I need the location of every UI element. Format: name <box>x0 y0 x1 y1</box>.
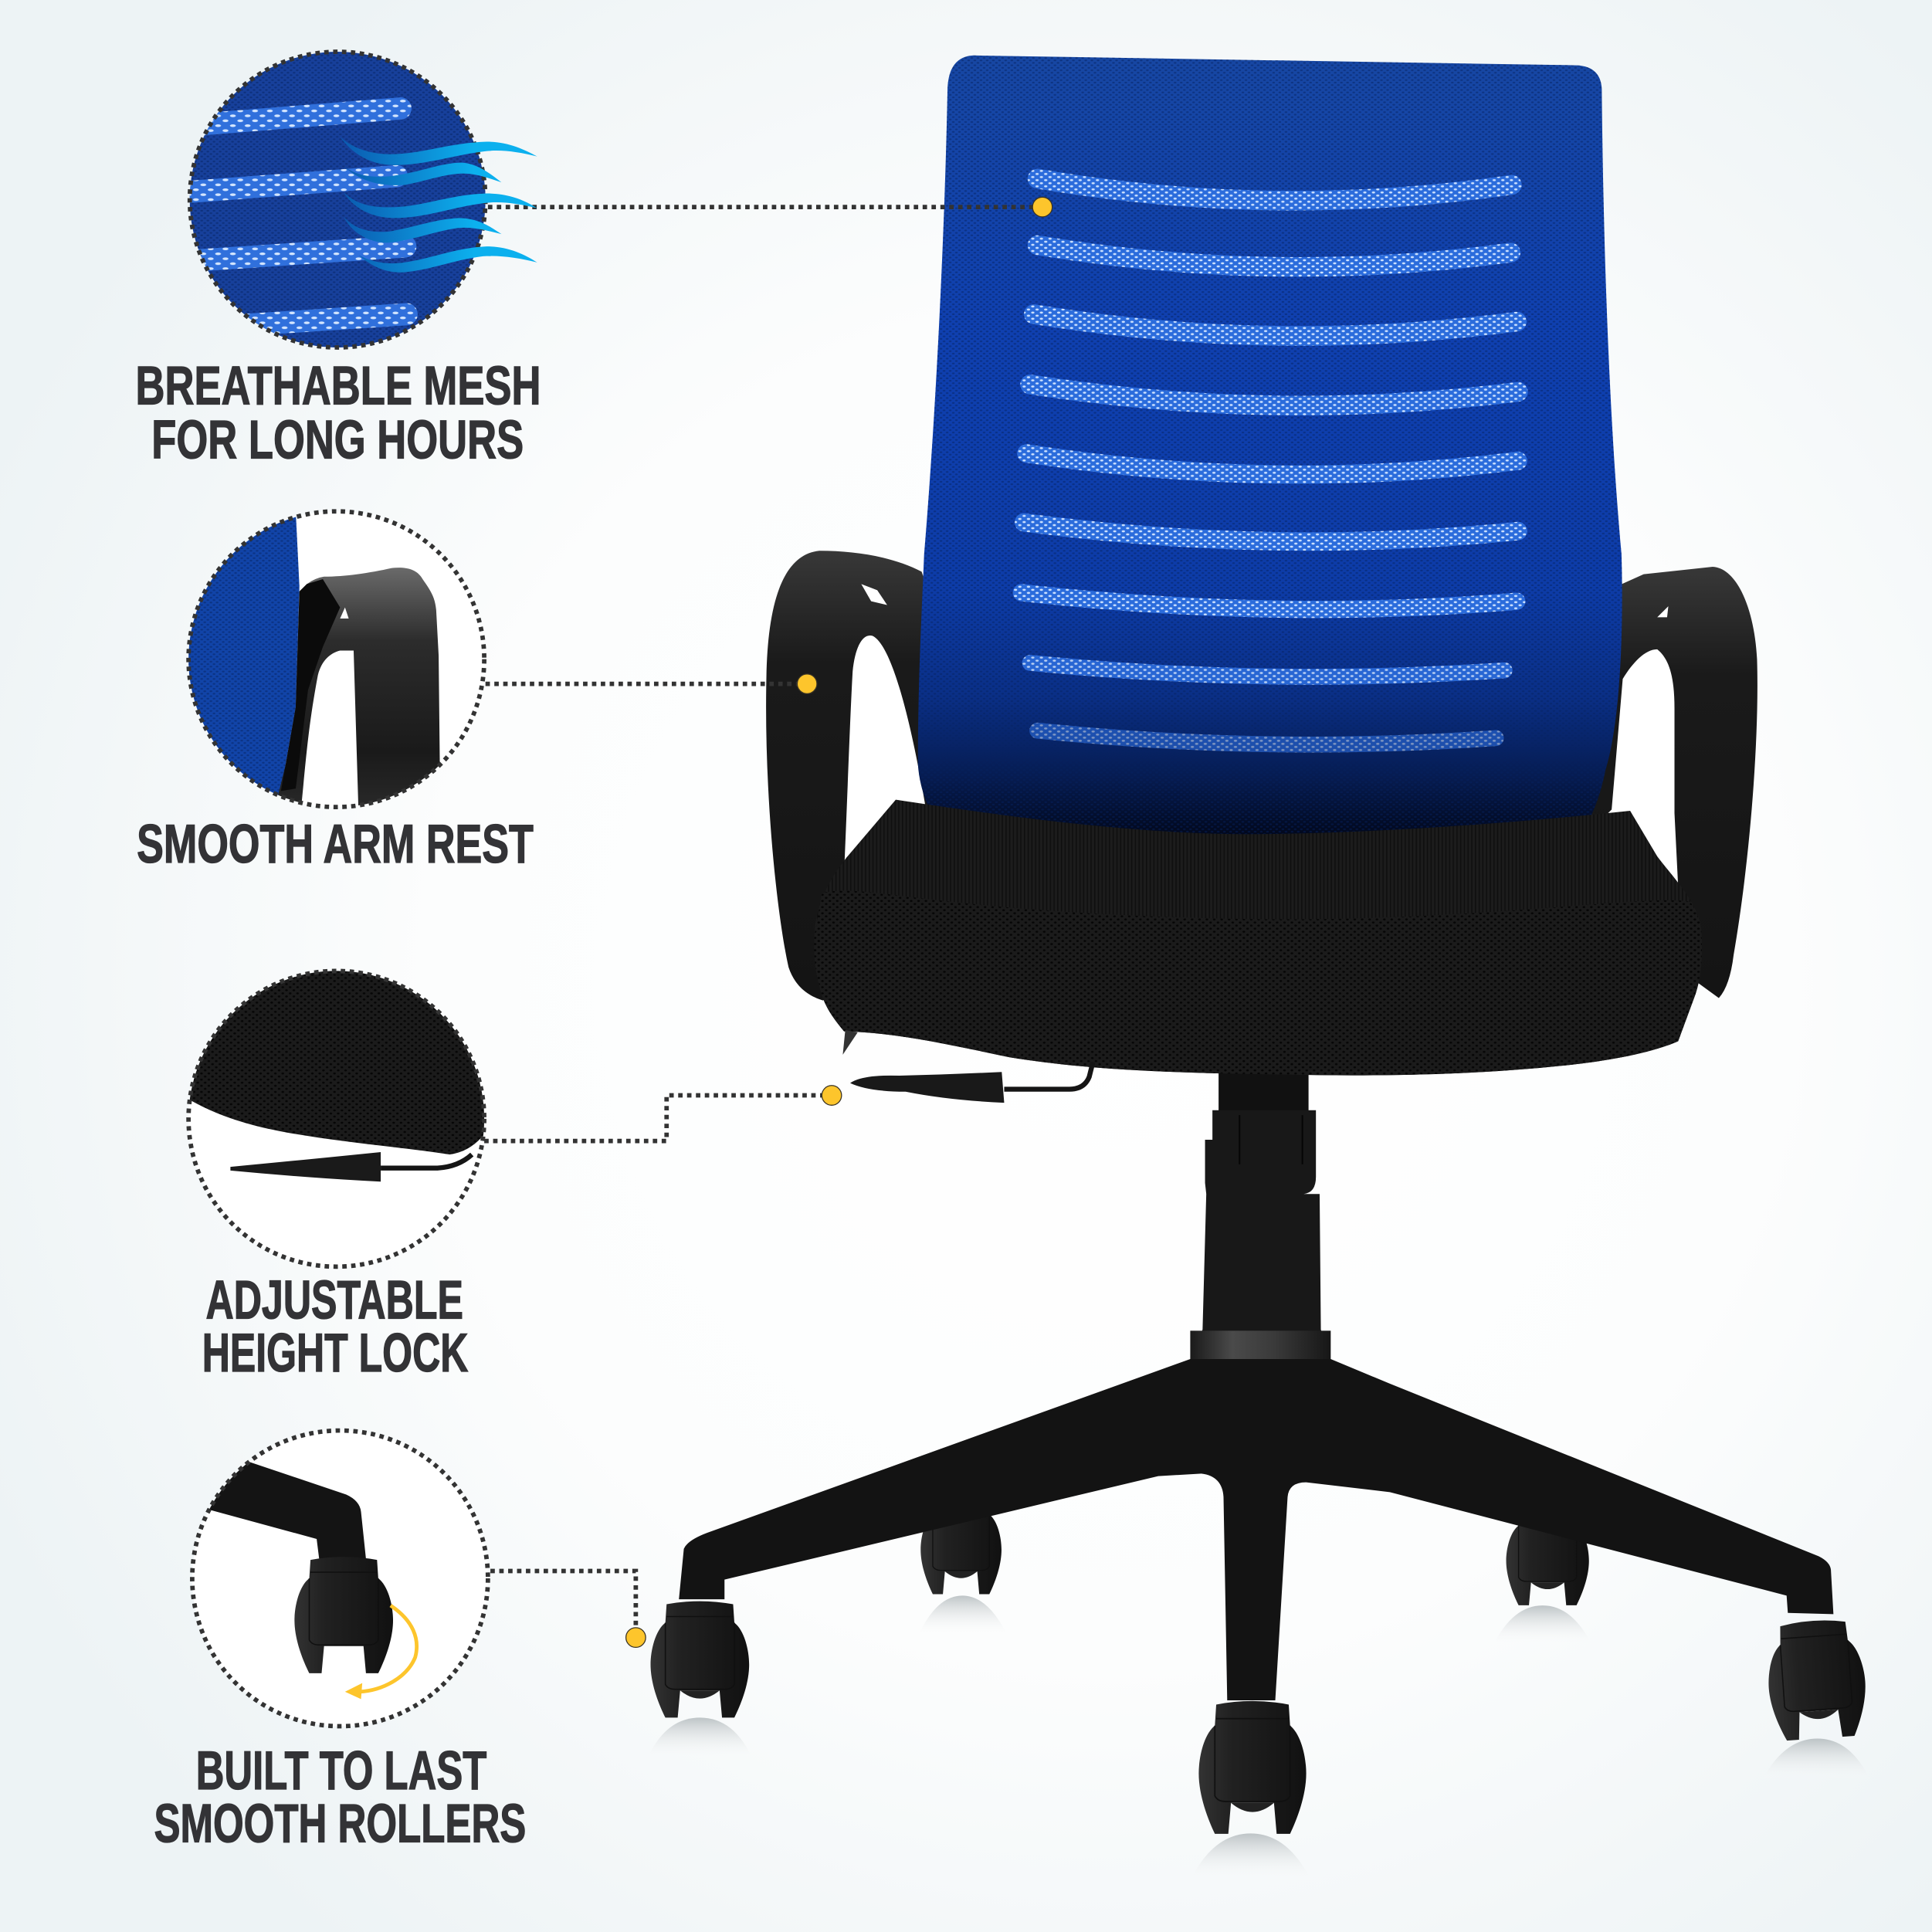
chair <box>651 56 1869 1834</box>
arm opening <box>844 636 927 887</box>
heading: BUILT TO LAST <box>196 1740 486 1801</box>
rotation arrow <box>345 1605 417 1699</box>
leader line and marker <box>484 1086 842 1141</box>
callout: arm rest <box>137 511 817 874</box>
magnified caster circle <box>185 1431 488 1727</box>
rear casters <box>920 1496 1589 1605</box>
heading <box>136 354 541 470</box>
heading <box>202 1269 469 1383</box>
heading <box>154 1740 526 1854</box>
leader line and marker <box>488 197 1052 217</box>
arm wedge <box>1657 606 1669 617</box>
callout: breathable mesh <box>136 49 1052 470</box>
heading: BREATHABLE MESH <box>136 354 541 415</box>
magnified arm rest circle <box>185 511 484 813</box>
heading: FOR LONG HOURS <box>151 409 524 470</box>
callout: rollers <box>154 1431 646 1854</box>
height adjustment lever <box>850 1062 1093 1103</box>
heading: HEIGHT LOCK <box>202 1322 469 1383</box>
leader line and marker <box>486 674 817 693</box>
magnified mesh circle <box>185 49 493 358</box>
front casters <box>651 1602 1869 1834</box>
mesh strap ventilation bands <box>1022 178 1518 744</box>
left armrest <box>766 551 949 1001</box>
gas lift column <box>1190 1067 1330 1361</box>
heading: SMOOTH ROLLERS <box>154 1793 526 1854</box>
backrest <box>918 56 1622 838</box>
caster reflections <box>647 1595 1870 1880</box>
seat cushion <box>814 800 1702 1076</box>
right armrest <box>1583 567 1757 998</box>
five-star base <box>679 1359 1833 1700</box>
magnified lever circle <box>185 961 493 1266</box>
heading: ADJUSTABLE <box>205 1269 463 1330</box>
leader line and marker <box>490 1571 646 1647</box>
air flow waves <box>340 137 537 273</box>
arm opening <box>1602 649 1678 887</box>
callout: height lock <box>185 961 842 1383</box>
arm wedge <box>861 584 887 605</box>
heading: SMOOTH ARM REST <box>137 813 534 874</box>
